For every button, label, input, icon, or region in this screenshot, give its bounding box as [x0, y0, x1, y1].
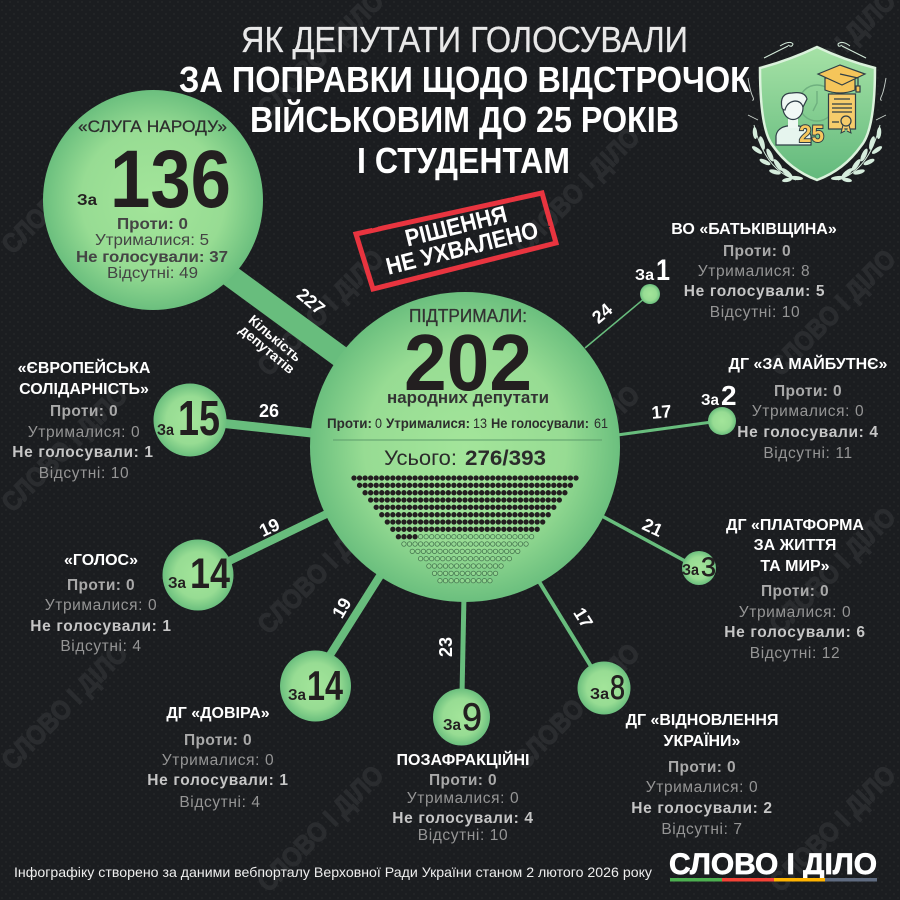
party text: Dovira: ДГ «ДОВІРА» — [166, 705, 270, 722]
party text: Holos: Проти: 0 — [67, 577, 135, 594]
icon: laurel and swirls — [748, 41, 886, 183]
party circle: Batkivshchyna — [635, 254, 670, 304]
edge labels — [256, 299, 672, 657]
party circle: Holos: За — [168, 575, 186, 592]
party circle: Dovira: 14 — [307, 662, 343, 709]
panel: Servant of the People circle: Не голосували: 37 — [76, 249, 228, 266]
party text: Non-faction: Утрималися: 0 — [407, 790, 519, 807]
panel: Servant of the People circle: «СЛУГА НАРОДУ» — [78, 118, 227, 136]
party text: Non-faction: Відсутні: 10 — [418, 827, 508, 844]
party circle: Non-faction: 9 — [462, 696, 482, 739]
party text: European Solidarity — [12, 358, 154, 482]
panel: Servant of the People circle: Проти: 0 — [117, 216, 188, 233]
edge labels: 17 — [651, 401, 672, 423]
text: СЛОВО І ДІЛО — [508, 380, 646, 518]
party text: European Solidarity: Відсутні: 10 — [39, 465, 129, 482]
stamp: decision not adopted — [356, 193, 556, 289]
party text: Platform for Life and Peace: ТА МИР» — [760, 558, 830, 575]
title: І СТУДЕНТАМ — [357, 140, 570, 181]
edge labels: 24 — [588, 299, 616, 328]
party circle: Non-faction — [433, 688, 490, 746]
text: СЛОВО І ДІЛО — [0, 380, 134, 518]
edge labels: 26 — [259, 401, 279, 421]
text: СЛОВО І ДІЛО — [252, 760, 390, 898]
panel: Servant of the People circle: Відсутні: 49 — [107, 265, 198, 282]
party text: Holos: Відсутні: 4 — [60, 638, 142, 655]
party text: Batkivshchyna: Відсутні: 10 — [710, 304, 800, 321]
party circle: European Solidarity: За — [157, 422, 174, 439]
stamp: decision not adopted: РІШЕННЯ — [402, 201, 510, 252]
party circle: European Solidarity — [154, 384, 226, 456]
panel: Servant of the People circle — [43, 90, 263, 310]
text: СЛОВО І ДІЛО — [0, 122, 134, 260]
panel: Servant of the People circle: За — [77, 192, 97, 209]
icon: shield — [760, 47, 875, 180]
vote breakdown row: Утрималися: — [386, 415, 470, 431]
party circle: Platform for Life and Peace: 3 — [701, 552, 716, 582]
party text: Non-faction: ПОЗАФРАКЦІЙНІ — [396, 750, 530, 769]
text: СЛОВО І ДІЛО — [252, 244, 390, 382]
title — [179, 19, 751, 181]
party circle: Platform for Life and Peace: За — [682, 562, 699, 579]
party circle: European Solidarity: 15 — [178, 392, 220, 446]
party circle: Dovira: За — [288, 687, 306, 704]
party text: Batkivshchyna: Не голосували: 5 — [684, 283, 825, 300]
party text: For the Future: ДГ «ЗА МАЙБУТНЄ» — [729, 354, 888, 373]
party text: Holos: Не голосували: 1 — [30, 618, 172, 635]
party circle: For the Future — [701, 380, 737, 435]
icon: shield with student, diploma and cap — [748, 41, 886, 183]
party circle: Holos — [162, 540, 234, 610]
party text: Batkivshchyna — [671, 221, 837, 321]
panel: Servant of the People circle: 136 — [110, 134, 231, 225]
party text: Platform for Life and Peace: ДГ «ПЛАТФОРМА — [726, 517, 864, 534]
title: ВІЙСЬКОВИМ ДО 25 РОКІВ — [250, 98, 679, 140]
party text: Holos: «ГОЛОС» — [64, 552, 138, 569]
label: deputies count 227 — [236, 284, 329, 377]
party text: Restoration of Ukraine: Проти: 0 — [668, 759, 736, 776]
party circle: Dovira — [280, 650, 351, 722]
vote breakdown row: Не голосували: — [491, 415, 589, 431]
party text: Platform for Life and Peace: Не голосували: 6 — [724, 624, 866, 641]
party text: Restoration of Ukraine: Не голосували: 2 — [631, 800, 773, 817]
party text: Platform for Life and Peace: ЗА ЖИТТЯ — [754, 537, 836, 554]
party text: Platform for Life and Peace: Проти: 0 — [761, 583, 829, 600]
party text: Non-faction: Проти: 0 — [429, 772, 497, 789]
party text: Restoration of Ukraine: УКРАЇНИ» — [664, 732, 741, 750]
footer source note: Інфографіку створено за даними вебпорталу Верховної Ради України станом 2 лютого 2026 року — [14, 864, 652, 880]
party text: For the Future: Проти: 0 — [774, 383, 842, 400]
vote breakdown row: 13 — [473, 415, 487, 431]
connector lines — [220, 272, 712, 695]
party text: European Solidarity: «ЄВРОПЕЙСЬКА — [18, 358, 151, 377]
edge labels: 17 — [569, 604, 597, 632]
party circle: Restoration of Ukraine: За — [590, 686, 609, 703]
edge labels: 23 — [436, 637, 456, 657]
total count: 276/393 — [465, 447, 546, 470]
party text: Platform for Life and Peace: Відсутні: 12 — [750, 645, 840, 662]
party text: Batkivshchyna: Утрималися: 8 — [698, 263, 810, 280]
title: ЗА ПОПРАВКИ ЩОДО ВІДСТРОЧОК — [179, 59, 751, 100]
party circle: Restoration of Ukraine: 8 — [610, 669, 625, 707]
party circle: Batkivshchyna: 1 — [656, 254, 670, 287]
text: СЛОВО І ДІЛО — [0, 638, 134, 776]
stamp: decision not adopted: НЕ УХВАЛЕНО — [383, 217, 541, 281]
icon: diploma — [828, 94, 856, 133]
party text: Holos: Утрималися: 0 — [45, 597, 157, 614]
party text: European Solidarity: Утрималися: 0 — [28, 424, 140, 441]
parliament seats chart — [354, 478, 576, 581]
party circle: Restoration of Ukraine — [578, 662, 630, 714]
party circle: For the Future: 2 — [721, 380, 737, 411]
edge labels: 19 — [328, 594, 355, 622]
party text: Dovira: Відсутні: 4 — [179, 794, 261, 811]
party text: Dovira: Утрималися: 0 — [162, 752, 274, 769]
icon: graduation cap — [818, 65, 865, 93]
icon: number 25: 25 — [799, 121, 824, 148]
panel: main supported circle: 202 — [404, 318, 532, 407]
panel: Servant of the People circle: Утрималися: 5 — [95, 232, 209, 249]
icon: student — [776, 93, 811, 145]
party text: Holos — [30, 552, 172, 655]
party text: Dovira: Не голосували: 1 — [147, 772, 289, 789]
panel: main supported circle — [310, 292, 620, 602]
party text: European Solidarity: СОЛІДАРНІСТЬ» — [19, 381, 149, 398]
label: deputies count 227: 227 — [293, 284, 329, 319]
text: СЛОВО І ДІЛО — [508, 122, 646, 260]
total count: Усього: — [384, 447, 457, 470]
party circle: Platform for Life and Peace — [682, 551, 716, 585]
panel: main supported circle: ПІДТРИМАЛИ: — [409, 306, 527, 326]
party text: European Solidarity: Проти: 0 — [50, 403, 118, 420]
party text: Dovira — [147, 705, 289, 811]
party text: Platform for Life and Peace — [724, 517, 866, 662]
party circle: Batkivshchyna: За — [635, 267, 654, 284]
vote breakdown row — [327, 415, 608, 431]
party circle: Holos: 14 — [190, 550, 230, 598]
panel: main supported circle: народних депутати — [387, 389, 549, 407]
text: СЛОВО І ДІЛО — [508, 638, 646, 776]
party text: Restoration of Ukraine — [626, 712, 778, 838]
title: ЯК ДЕПУТАТИ ГОЛОСУВАЛИ — [241, 19, 688, 60]
edge labels: 19 — [256, 514, 283, 541]
party text: For the Future: Не голосували: 4 — [737, 424, 879, 441]
label: deputies count 227: Кількість — [246, 311, 305, 365]
total count — [384, 447, 546, 470]
party text: For the Future: Утрималися: 0 — [752, 403, 864, 420]
vote breakdown row: Проти: — [327, 415, 372, 431]
icon: clock — [799, 85, 835, 121]
party text: Restoration of Ukraine: Утрималися: 0 — [646, 779, 758, 796]
party text: Non-faction: Не голосували: 4 — [392, 810, 534, 827]
party text: European Solidarity: Не голосували: 1 — [12, 444, 154, 461]
party text: For the Future — [729, 354, 888, 462]
party text: Platform for Life and Peace: Утрималися: 0 — [739, 604, 851, 621]
party text: Batkivshchyna: ВО «БАТЬКІВЩИНА» — [671, 221, 837, 238]
party text: Restoration of Ukraine: ДГ «ВІДНОВЛЕННЯ — [626, 712, 778, 729]
party text: Dovira: Проти: 0 — [184, 732, 252, 749]
party text: Batkivshchyna: Проти: 0 — [723, 243, 791, 260]
party text: Non-faction — [392, 750, 534, 844]
vote breakdown row: 61 — [594, 415, 608, 431]
text: СЛОВО І ДІЛО — [252, 502, 390, 640]
logo: СЛОВО І ДІЛО — [669, 848, 877, 881]
edge labels: 21 — [639, 514, 666, 541]
party circle: Non-faction: За — [443, 717, 461, 734]
party text: Restoration of Ukraine: Відсутні: 7 — [661, 821, 743, 838]
label: deputies count 227: депутатів — [236, 321, 298, 377]
party text: For the Future: Відсутні: 11 — [763, 445, 853, 462]
party circle: For the Future: За — [701, 392, 719, 409]
vote breakdown row: 0 — [375, 415, 382, 431]
